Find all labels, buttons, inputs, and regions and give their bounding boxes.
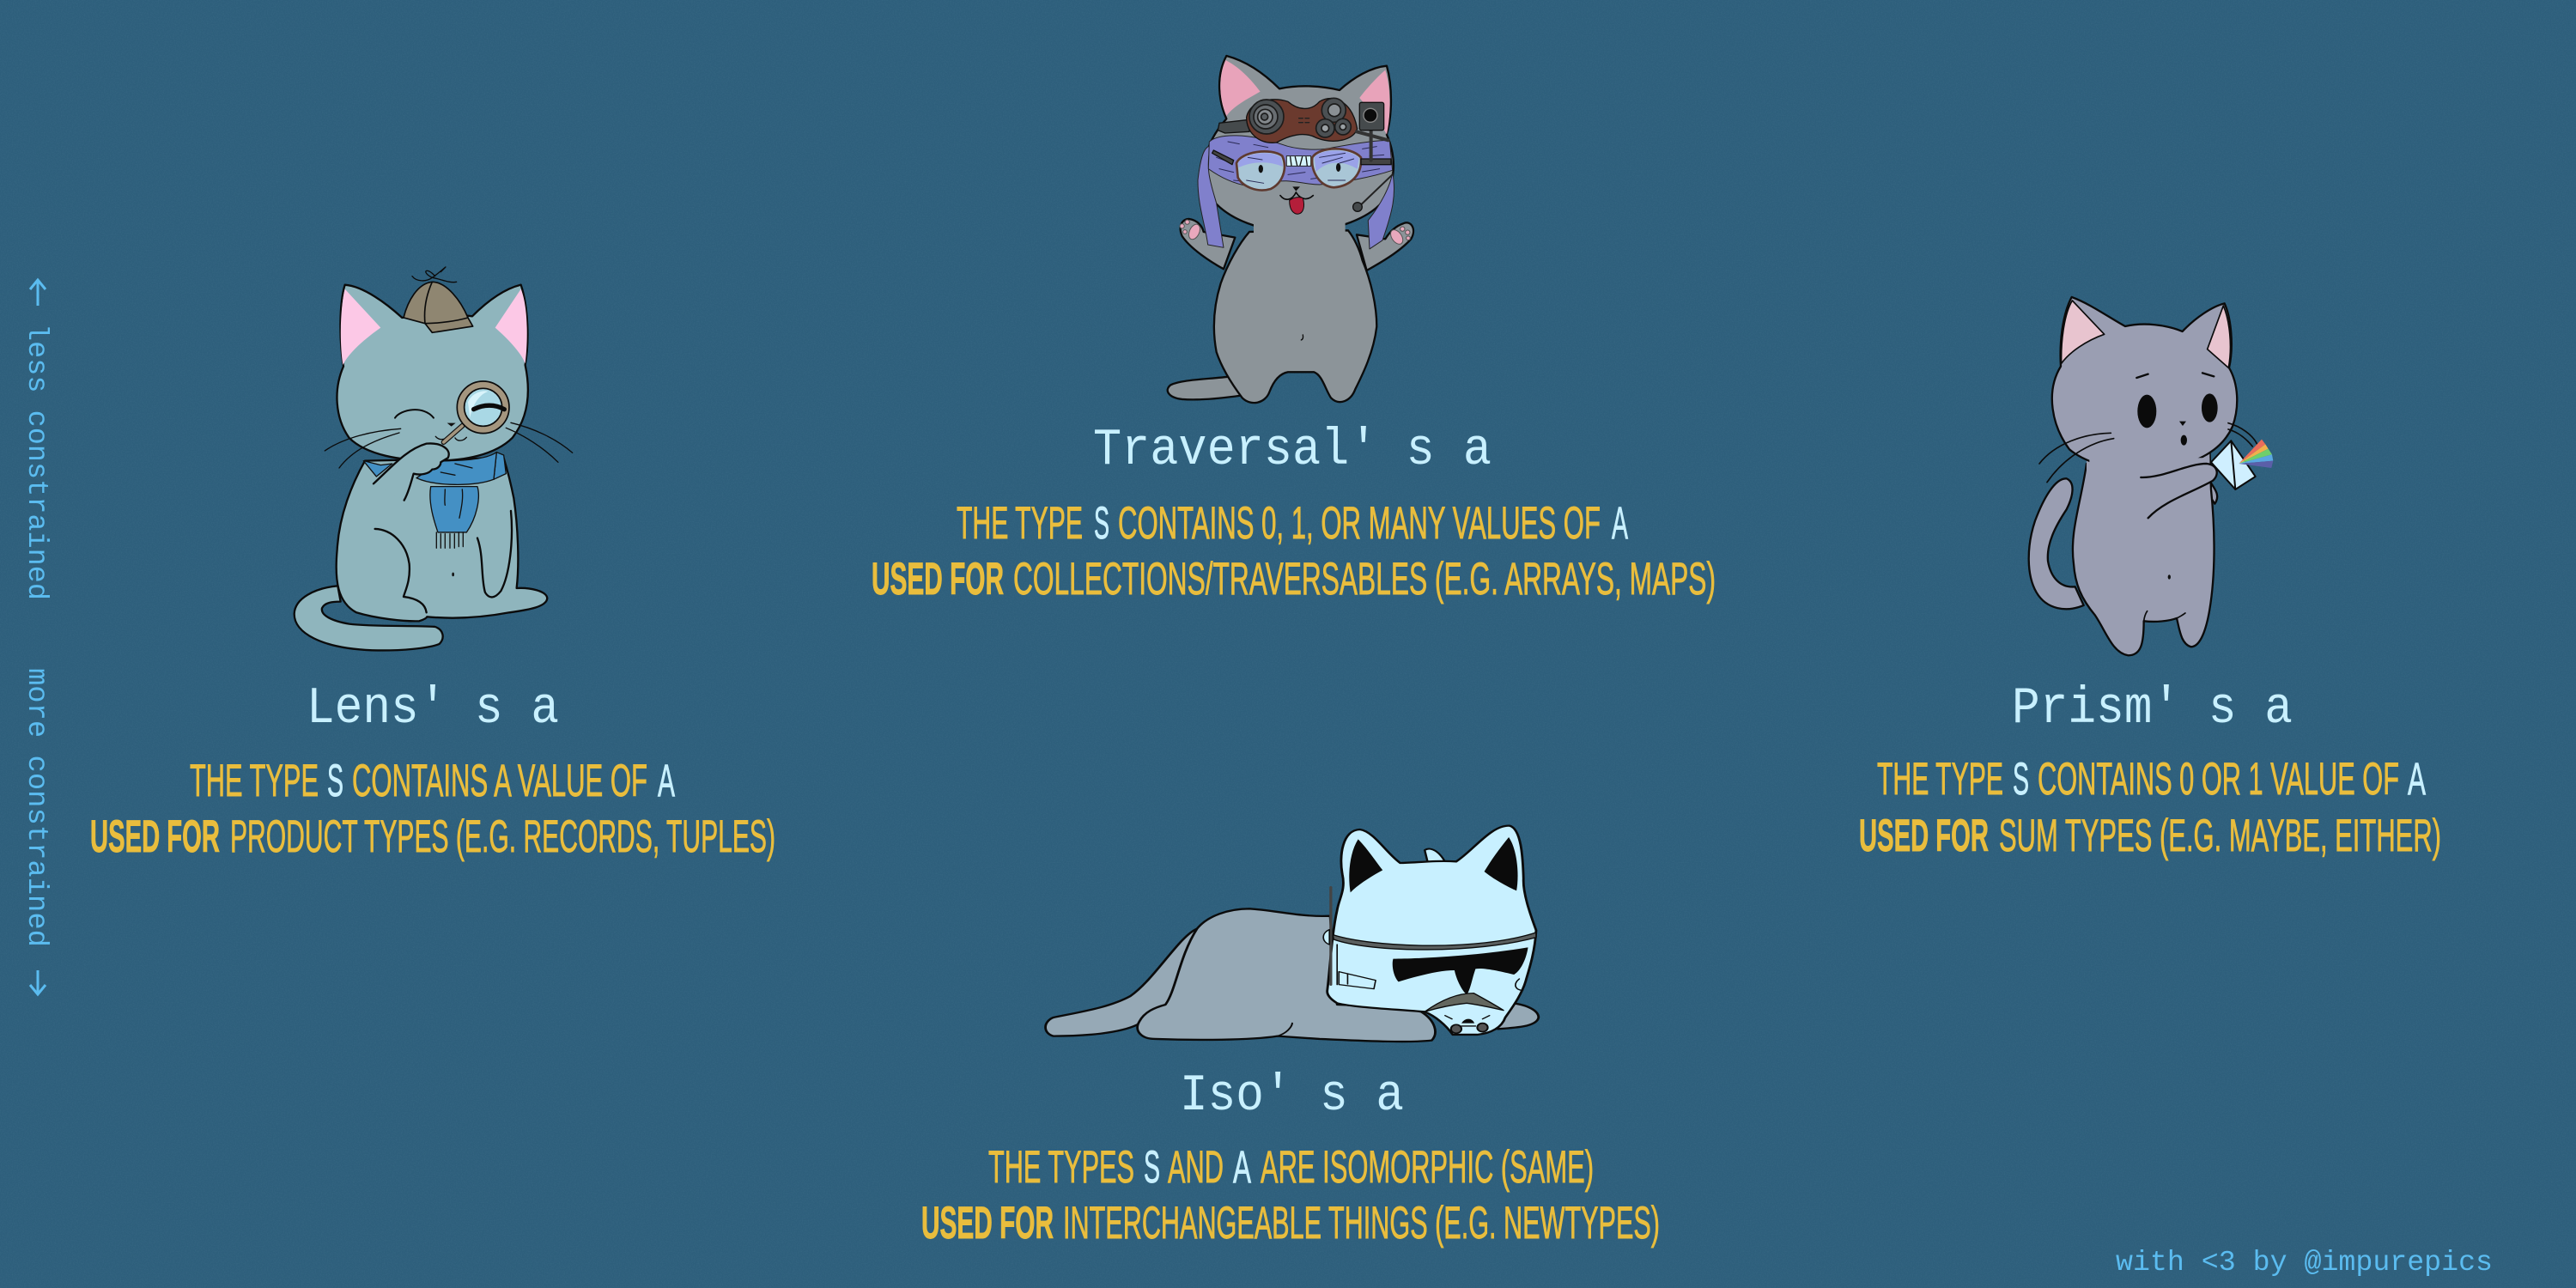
paw holding magnifier xyxy=(374,443,449,501)
description: traversal: CONTAINS 0, 1, OR MANY VALUES OF xyxy=(1118,498,1601,549)
icon: iso cat with helmet xyxy=(1046,826,1539,1042)
magnifier xyxy=(444,381,509,442)
description: iso: THE TYPES xyxy=(988,1142,1134,1193)
description: traversal: S xyxy=(1094,498,1109,549)
hat xyxy=(404,267,473,332)
heading: prism: Prism' s a xyxy=(2012,680,2293,738)
description: traversal: A xyxy=(1612,498,1628,549)
arrow: up xyxy=(30,280,46,306)
description: traversal: COLLECTIONS/TRAVERSABLES (E.G. ARRAYS, MAPS) xyxy=(1013,554,1716,605)
prism with rainbow xyxy=(2211,440,2273,489)
arm xyxy=(2141,464,2217,518)
description: iso: A xyxy=(1233,1142,1251,1193)
description: prism: USED FOR xyxy=(1859,811,1989,861)
hair band xyxy=(1198,136,1394,249)
description: iso xyxy=(921,1142,1660,1249)
side axis: constraint direction xyxy=(21,280,52,994)
description: traversal xyxy=(872,498,1716,605)
panel: lens xyxy=(90,267,775,862)
heading: iso: Iso' s a xyxy=(1180,1067,1404,1126)
heading: lens: Lens' s a xyxy=(307,680,559,738)
goggles xyxy=(1218,98,1358,143)
description: iso: AND xyxy=(1168,1142,1224,1193)
description: traversal: THE TYPE xyxy=(957,498,1083,549)
description: lens xyxy=(90,756,775,862)
heading: traversal: Traversal' s a xyxy=(1093,422,1492,480)
description: iso: ARE ISOMORPHIC (SAME) xyxy=(1261,1142,1594,1193)
scarf xyxy=(363,453,506,548)
panel: iso xyxy=(921,826,1660,1249)
description: iso: USED FOR xyxy=(921,1198,1054,1249)
description: lens: A xyxy=(658,756,675,806)
credit: with <3 by @impurepics xyxy=(2116,1247,2493,1279)
description: lens: S xyxy=(327,756,343,806)
description: lens: USED FOR xyxy=(90,811,220,862)
panel: prism xyxy=(1859,297,2441,861)
glasses xyxy=(1236,149,1361,190)
label: less constrained: less constrained xyxy=(21,324,52,600)
helmet xyxy=(1323,826,1536,1035)
label: more constrained: more constrained xyxy=(21,668,52,947)
camera and microphone xyxy=(1353,102,1393,211)
description: prism: A xyxy=(2408,754,2426,805)
description: lens: PRODUCT TYPES (E.G. RECORDS, TUPLES) xyxy=(230,811,775,862)
description: iso: S xyxy=(1144,1142,1160,1193)
description: prism: THE TYPE xyxy=(1877,754,2003,805)
arrow: down xyxy=(30,970,46,994)
icon: prism cat xyxy=(2029,297,2273,655)
description: lens: CONTAINS A VALUE OF xyxy=(352,756,647,806)
description: prism xyxy=(1859,754,2441,861)
icon: traversal cat with goggles xyxy=(1168,56,1413,403)
icon: lens cat with magnifier xyxy=(295,267,573,650)
description: traversal: USED FOR xyxy=(872,554,1004,605)
panel: traversal xyxy=(872,56,1716,605)
description: lens: THE TYPE xyxy=(190,756,319,806)
description: prism: S xyxy=(2013,754,2029,805)
description: iso: INTERCHANGEABLE THINGS (E.G. NEWTYPES) xyxy=(1063,1198,1660,1249)
